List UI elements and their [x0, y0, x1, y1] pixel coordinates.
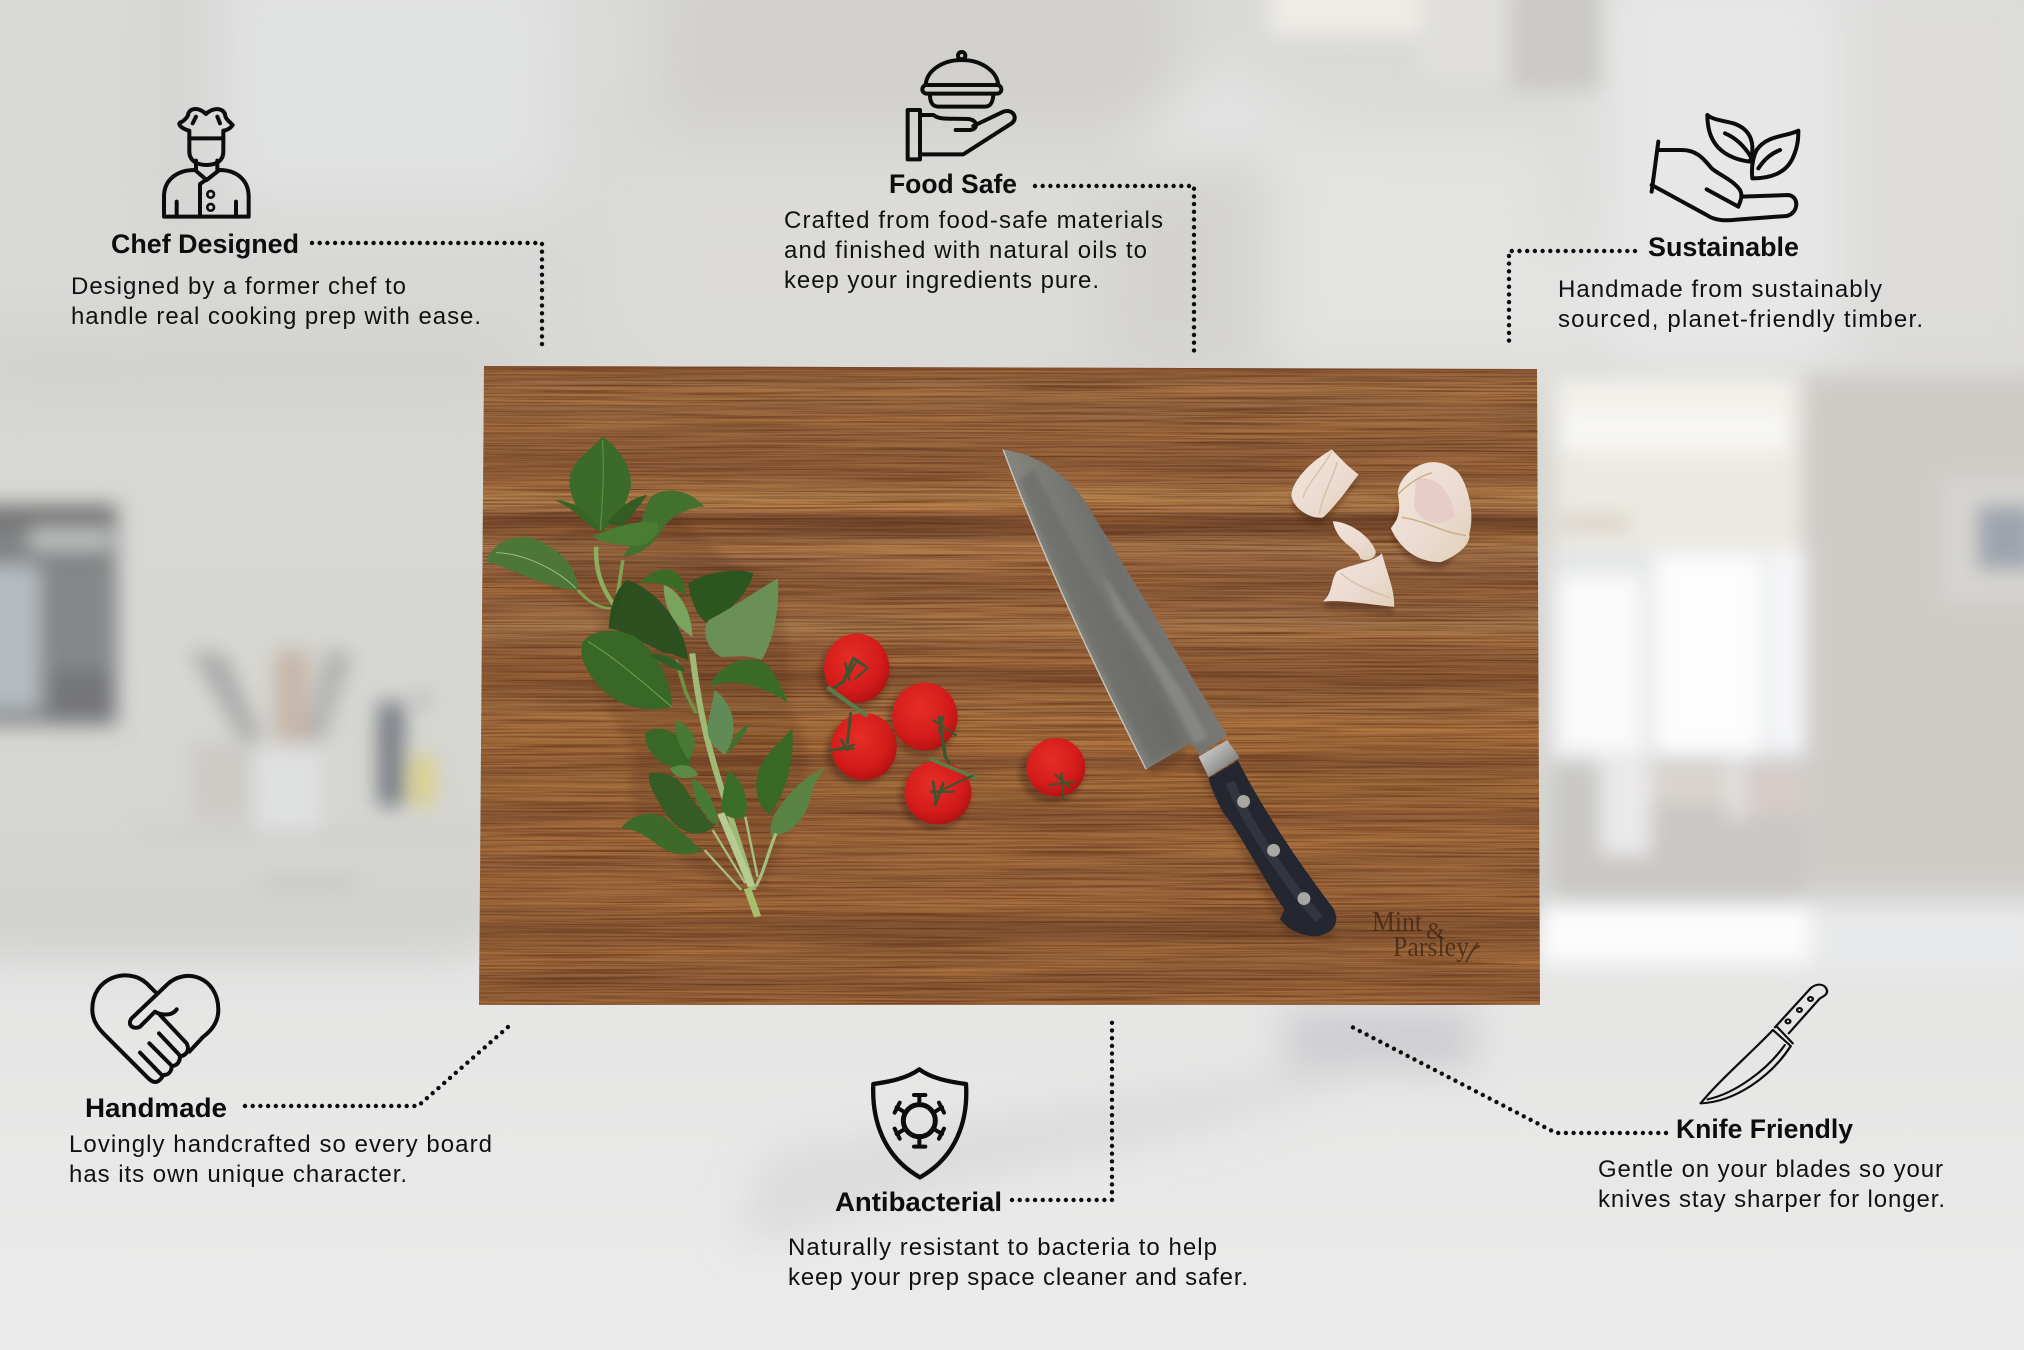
cherry tomatoes [819, 634, 1085, 830]
description [784, 207, 1163, 294]
description: Handmade from sustainably [1558, 276, 1882, 303]
heading: Antibacterial [835, 1187, 1002, 1217]
garlic cloves [1291, 450, 1471, 614]
panel: antibacterial [788, 1022, 1248, 1291]
icon: serving cloche on hand [908, 52, 1015, 159]
icon: chef [164, 109, 249, 217]
description: Crafted from food-safe materials [784, 207, 1163, 234]
description [1558, 276, 1923, 333]
connector [1012, 1022, 1112, 1200]
icon: shield with virus [873, 1069, 966, 1177]
heading: Sustainable [1648, 232, 1799, 262]
panel: food safe [784, 52, 1194, 351]
description: has its own unique character. [69, 1161, 407, 1188]
brand mark [1372, 906, 1480, 963]
description: keep your ingredients pure. [784, 267, 1099, 294]
description [1598, 1156, 1945, 1213]
panel: knife friendly [1352, 985, 1945, 1213]
description: Lovingly handcrafted so every board [69, 1131, 492, 1158]
connector [1509, 251, 1635, 347]
description: Naturally resistant to bacteria to help [788, 1234, 1217, 1261]
chef knife [1003, 450, 1337, 941]
heading: Chef Designed [111, 229, 299, 259]
connector [312, 243, 542, 347]
description: Designed by a former chef to [71, 273, 406, 300]
description [71, 273, 481, 330]
panel: chef designed [71, 109, 542, 347]
heading: Knife Friendly [1676, 1114, 1853, 1144]
panel: sustainable [1509, 115, 1923, 347]
connector [1035, 186, 1194, 351]
description: keep your prep space cleaner and safer. [788, 1264, 1248, 1291]
icon: heart handshake [92, 975, 218, 1082]
heading: Food Safe [889, 169, 1017, 199]
cutting board [470, 360, 1550, 1010]
description [69, 1131, 492, 1188]
icon: hand holding sprout [1652, 115, 1798, 220]
brand mark: & [1426, 919, 1445, 945]
brand mark: Mint [1372, 906, 1422, 938]
connector [1352, 1027, 1666, 1133]
brand mark: Parsley [1393, 931, 1469, 963]
description: handle real cooking prep with ease. [71, 303, 481, 330]
basil sprig [486, 437, 827, 917]
panel: handmade [69, 975, 508, 1188]
connector [245, 1027, 508, 1106]
icon: kitchen knife [1701, 985, 1827, 1103]
description: and finished with natural oils to [784, 237, 1147, 264]
heading: Handmade [85, 1093, 227, 1123]
description: sourced, planet-friendly timber. [1558, 306, 1923, 333]
description: knives stay sharper for longer. [1598, 1186, 1945, 1213]
description [788, 1234, 1248, 1291]
description: Gentle on your blades so your [1598, 1156, 1943, 1183]
